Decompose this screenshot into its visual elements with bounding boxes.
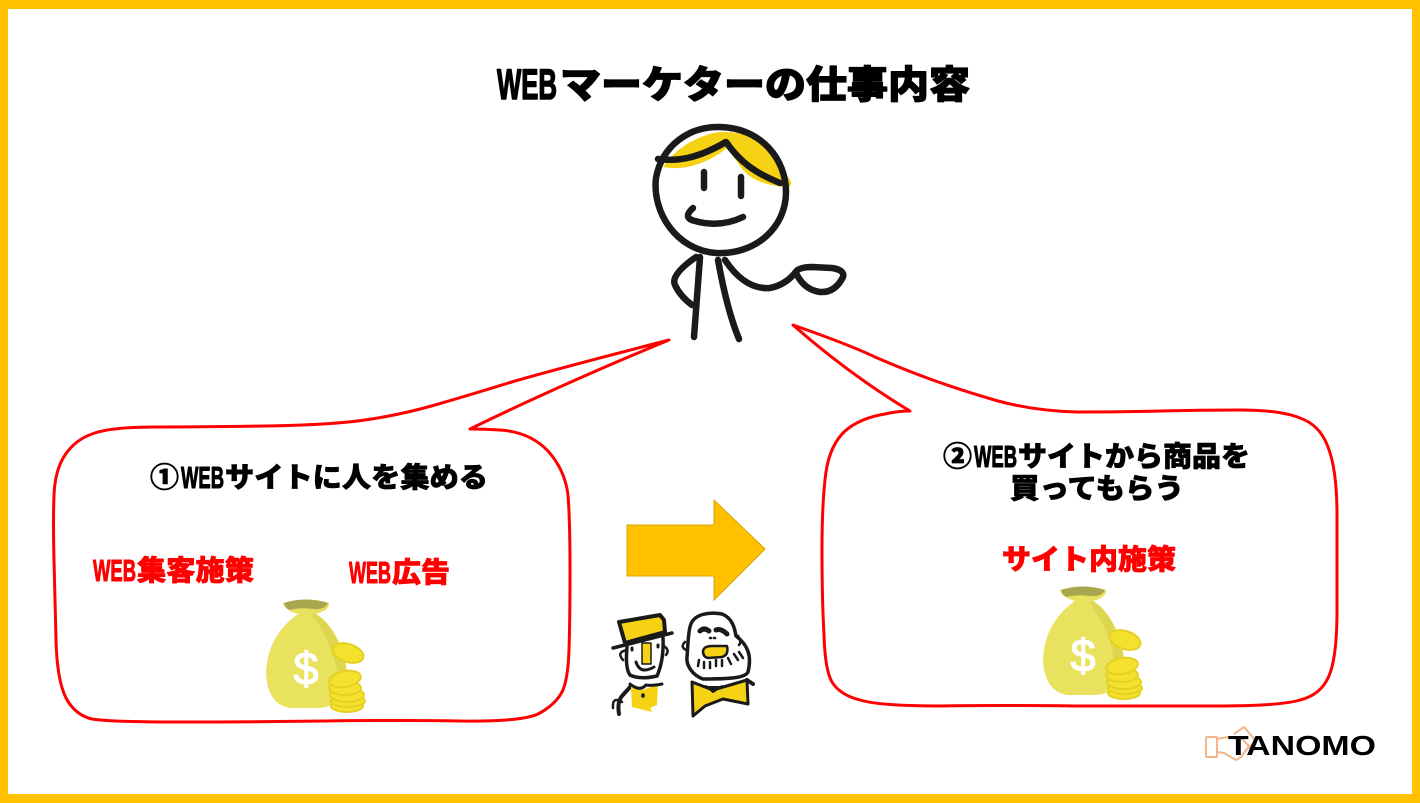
title: WEB (497, 61, 557, 109)
right bubble heading (943, 439, 1250, 504)
title: マーケターの仕事内容 (560, 65, 970, 107)
right bubble heading: WEB (974, 439, 1017, 474)
icon: handshake (1206, 727, 1255, 760)
left bubble heading: サイトに人を集める (225, 462, 488, 493)
left label: WEB集客施策: WEB (93, 553, 136, 588)
logo wordmark: TANOMO (1228, 730, 1376, 761)
left bubble heading (150, 460, 488, 495)
right bubble heading: 買ってもらう (1010, 473, 1184, 504)
left bubble heading: WEB (181, 460, 224, 495)
speech bubble: left (54, 340, 669, 722)
speech bubble: right (793, 325, 1337, 706)
icon: money bag left (266, 600, 366, 712)
right label: サイト内施策: サイト内施策 (1002, 544, 1176, 575)
left label: WEB広告: WEB (349, 555, 391, 590)
icon: money bag right (1043, 586, 1143, 699)
icon: two gentlemen (613, 613, 753, 716)
right bubble heading: ② (943, 441, 972, 472)
logo: TANOMO (1206, 727, 1376, 761)
right bubble heading: サイトから商品を (1018, 441, 1250, 472)
left bubble heading: ① (150, 462, 179, 493)
left label: WEB広告: 広告 (392, 557, 450, 588)
left label: WEB集客施策: 集客施策 (137, 555, 254, 586)
arrow (627, 500, 765, 600)
left label: WEB集客施策 (93, 553, 254, 588)
icon: marketer stick figure (656, 127, 843, 339)
